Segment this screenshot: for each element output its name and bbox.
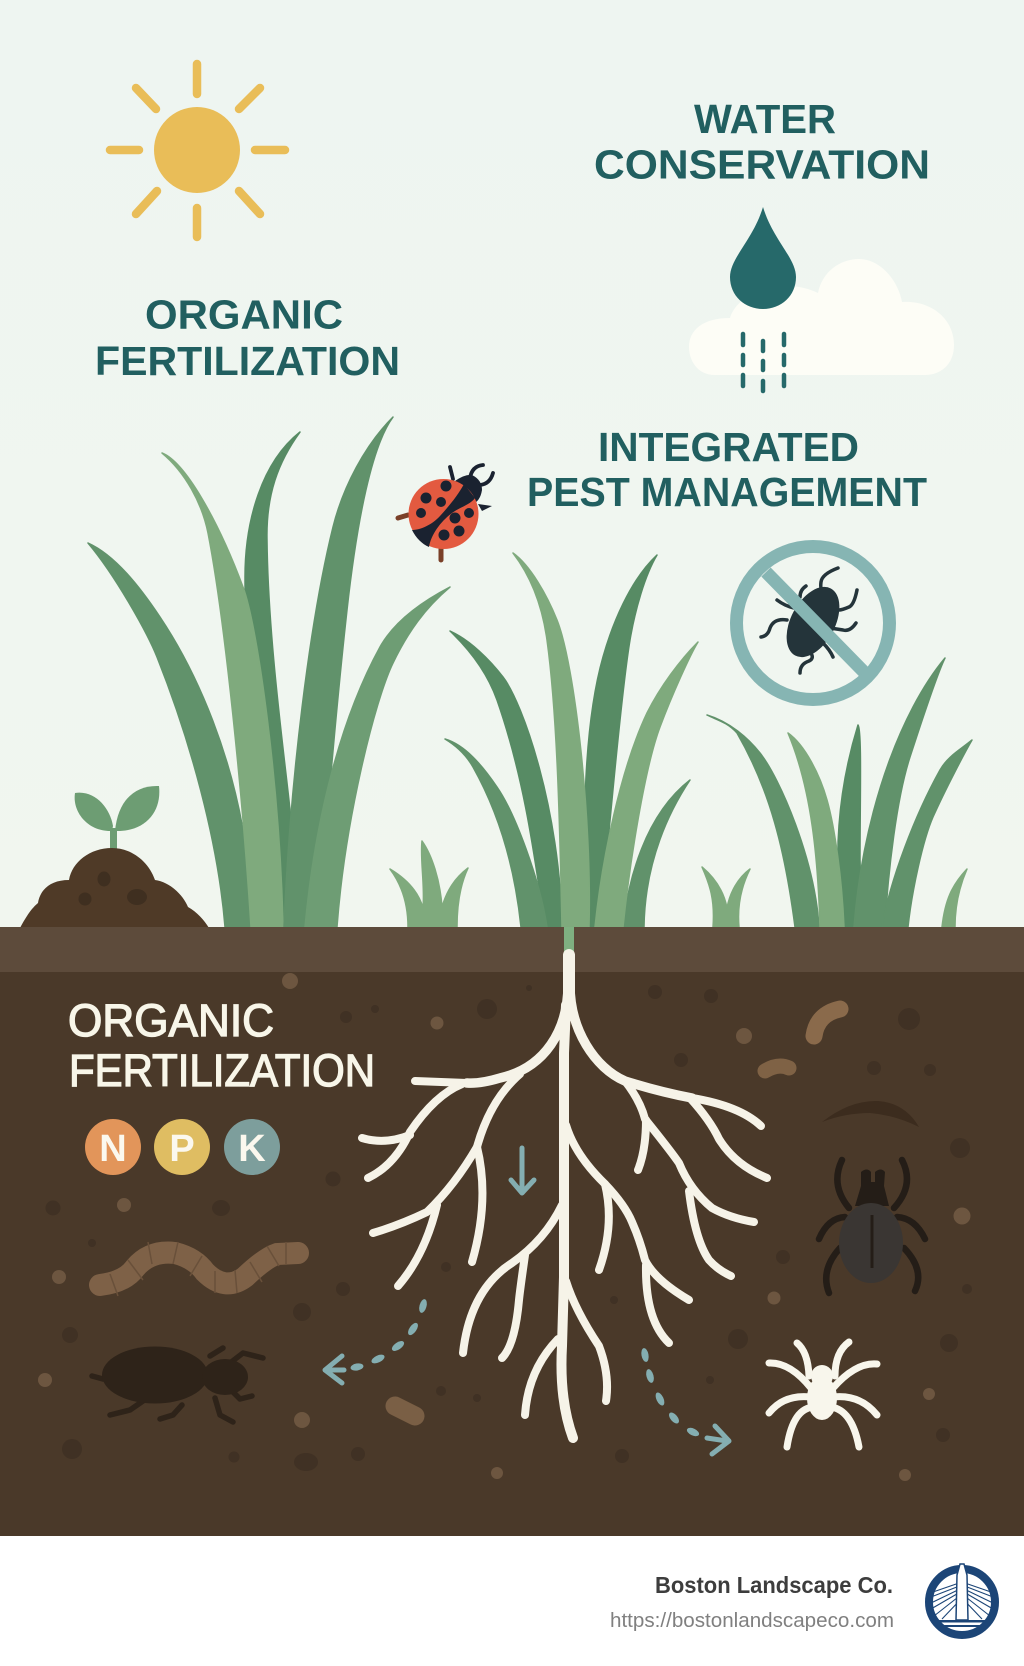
root system xyxy=(362,955,767,1438)
heading: integrated pest management: INTEGRATED xyxy=(598,424,859,470)
heading: water conservation: WATER xyxy=(694,96,836,142)
soil specks xyxy=(46,985,972,1471)
grass tuft: small right xyxy=(702,867,750,927)
soil panel xyxy=(0,972,1024,1536)
heading: water conservation: CONSERVATION xyxy=(594,142,930,188)
soil pebbles xyxy=(38,973,970,1481)
icon: seedling xyxy=(75,786,159,850)
flow arrow: down xyxy=(511,1148,534,1193)
sky background xyxy=(0,0,1024,930)
icon: no pests sign xyxy=(736,546,890,700)
logo: bridge emblem xyxy=(929,1564,995,1635)
earthworm xyxy=(100,1242,298,1296)
grass cluster: center xyxy=(445,553,698,927)
white spider xyxy=(769,1342,877,1447)
soil grubs xyxy=(395,1009,840,1416)
heading: water conservation xyxy=(594,96,930,188)
heading: integrated pest management xyxy=(527,424,927,515)
burrow shadow xyxy=(822,1101,919,1127)
heading: organic fertilization (soil): FERTILIZATION xyxy=(69,1045,375,1096)
heading: organic fertilization xyxy=(95,292,400,384)
icon: ladybug xyxy=(398,465,493,560)
topsoil band xyxy=(0,927,1024,972)
grass tuft: small left xyxy=(390,841,468,927)
NPK nutrient badges xyxy=(85,1119,280,1175)
flow arrow: dashed left xyxy=(325,1298,428,1383)
icon: sun xyxy=(110,64,285,237)
footer: company name: Boston Landscape Co. xyxy=(655,1572,893,1598)
heading: organic fertilization (soil) xyxy=(68,995,375,1096)
icon: rain dashes xyxy=(743,334,784,391)
compost mound xyxy=(20,848,209,928)
dark beetle xyxy=(819,1160,925,1293)
heading: organic fertilization (soil): ORGANIC xyxy=(68,995,274,1046)
icon: cloud xyxy=(689,259,954,375)
heading: integrated pest management: PEST MANAGEMENT xyxy=(527,469,927,515)
footer xyxy=(0,1536,1024,1666)
NPK nutrient badges: P xyxy=(169,1128,195,1170)
footer: url: https://bostonlandscapeco.com xyxy=(610,1610,894,1632)
NPK nutrient badges: K xyxy=(238,1128,266,1170)
heading: organic fertilization: ORGANIC xyxy=(145,292,343,338)
flow arrow: dashed right xyxy=(640,1347,729,1454)
root stem green tip xyxy=(564,927,574,956)
heading: organic fertilization: FERTILIZATION xyxy=(95,338,400,384)
grass cluster: right xyxy=(707,658,972,927)
beetle silhouette xyxy=(92,1346,263,1422)
NPK nutrient badges: N xyxy=(99,1128,127,1170)
icon: water drop xyxy=(730,207,796,309)
grass cluster: left tall xyxy=(88,417,450,927)
